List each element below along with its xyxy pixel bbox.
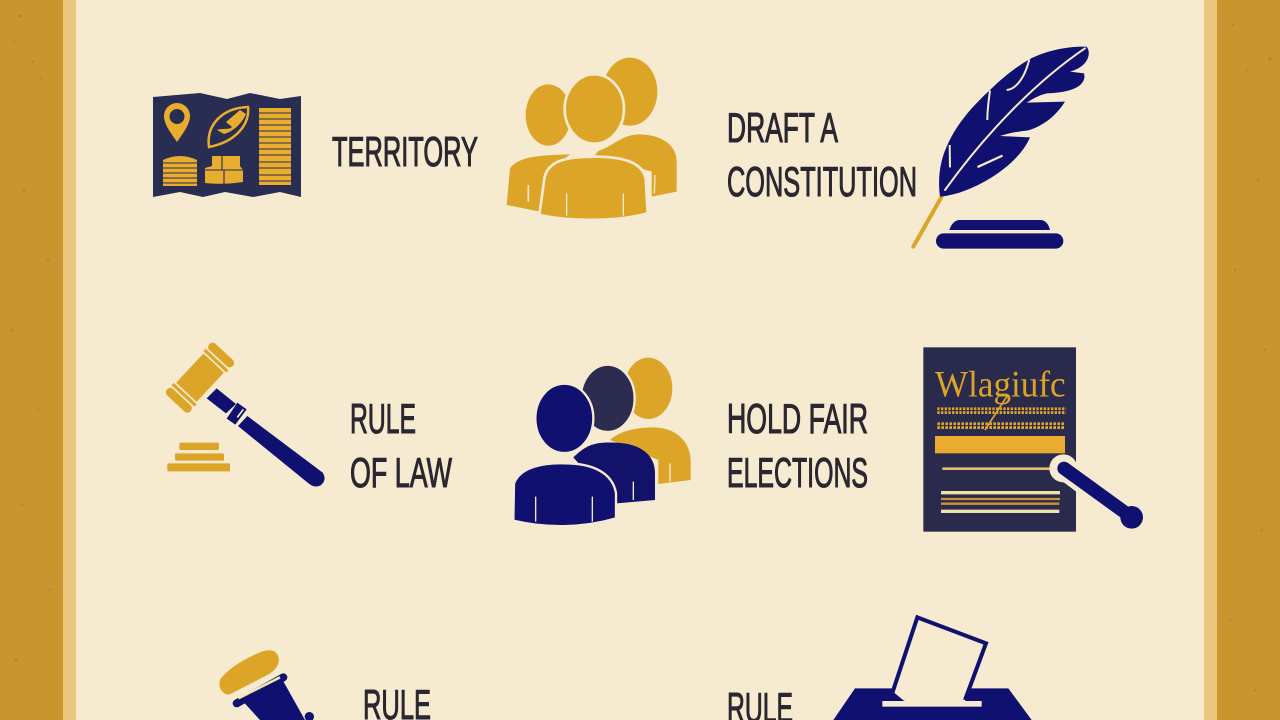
icon: navy people group <box>513 358 691 526</box>
label: draft a constitution: DRAFT A <box>727 104 838 151</box>
icon: quill and base <box>913 47 1089 249</box>
label: draft a constitution <box>727 104 917 205</box>
icon: ballot box <box>833 617 1032 720</box>
label: territory: TERRITORY <box>332 128 478 175</box>
label: rule of law <box>350 395 452 496</box>
icon: folded map <box>153 93 301 197</box>
label: draft a constitution: CONSTITUTION <box>727 158 917 205</box>
label: hold fair elections: ELECTIONS <box>727 449 868 496</box>
label: rule of law: OF LAW <box>350 449 452 496</box>
icon: document with magnifier: Wlagiufc <box>935 365 1066 406</box>
label: hold fair elections: HOLD FAIR <box>727 395 868 442</box>
icon: gavel <box>164 341 325 487</box>
icon: gavel cropped <box>219 650 314 720</box>
icon: document with magnifier <box>923 347 1143 532</box>
label: rule of law: RULE <box>350 395 416 442</box>
icon: gold people group <box>507 58 677 220</box>
label: hold fair elections <box>727 395 868 496</box>
